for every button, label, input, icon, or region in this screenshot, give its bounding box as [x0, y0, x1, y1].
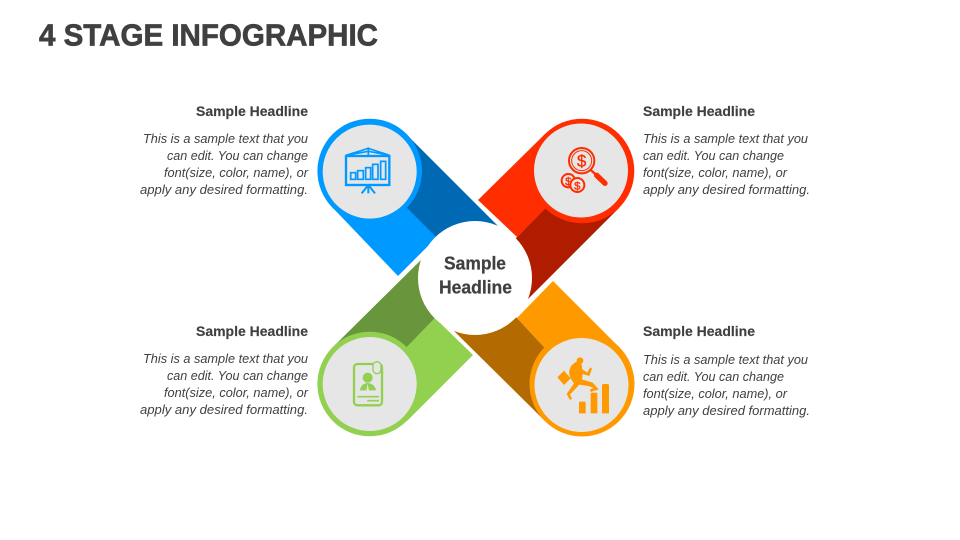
text block: bottom left: [140, 323, 309, 417]
text block: top left: can edit. You can change: [167, 149, 308, 163]
text block: top right: This is a sample text that you: [643, 132, 808, 146]
icon: magnifier and coins: $: [574, 180, 581, 192]
text block: bottom left: Sample Headline: [196, 323, 308, 339]
icon: magnifier and coins: $: [577, 152, 586, 171]
text block: bottom right: apply any desired formatting.: [643, 404, 810, 418]
center circle: Headline: [439, 278, 512, 298]
title: 4 STAGE INFOGRAPHIC: [39, 18, 378, 52]
text block: bottom left: apply any desired formatting.: [140, 403, 308, 417]
text block: top left: Sample Headline: [196, 103, 308, 119]
icon: presentation board: [346, 147, 389, 193]
panel: orange stage: [454, 278, 634, 436]
icon: id card: [354, 362, 382, 405]
icon: magnifier and coins: [562, 148, 605, 192]
panel: blue stage: [317, 119, 498, 278]
text block: top right: apply any desired formatting.: [643, 183, 810, 197]
text block: top left: font(size, color, name), or: [164, 166, 309, 180]
text block: top left: apply any desired formatting.: [140, 183, 308, 197]
text block: bottom right: Sample Headline: [643, 323, 755, 339]
icon: magnifier and coins: $: [565, 176, 572, 188]
text block: top left: This is a sample text that you: [143, 132, 308, 146]
text block: bottom right: can edit. You can change: [643, 370, 784, 384]
text block: bottom right: This is a sample text that you: [643, 353, 808, 367]
center circle: Sample: [444, 254, 506, 274]
center circle: [418, 221, 532, 335]
text block: bottom left: This is a sample text that you: [143, 352, 308, 366]
panel: red stage: [475, 119, 634, 299]
text block: top left: [140, 103, 309, 197]
icon: climbing businessman with bars: [557, 357, 609, 413]
text block: bottom right: font(size, color, name), or: [643, 387, 788, 401]
text block: bottom right: [643, 323, 810, 418]
text block: top right: can edit. You can change: [643, 149, 784, 163]
text block: top right: [643, 103, 810, 197]
text block: top right: Sample Headline: [643, 103, 755, 119]
text block: bottom left: can edit. You can change: [167, 369, 308, 383]
text block: top right: font(size, color, name), or: [643, 166, 788, 180]
text block: bottom left: font(size, color, name), or: [164, 386, 309, 400]
panel: green stage: [317, 258, 475, 436]
